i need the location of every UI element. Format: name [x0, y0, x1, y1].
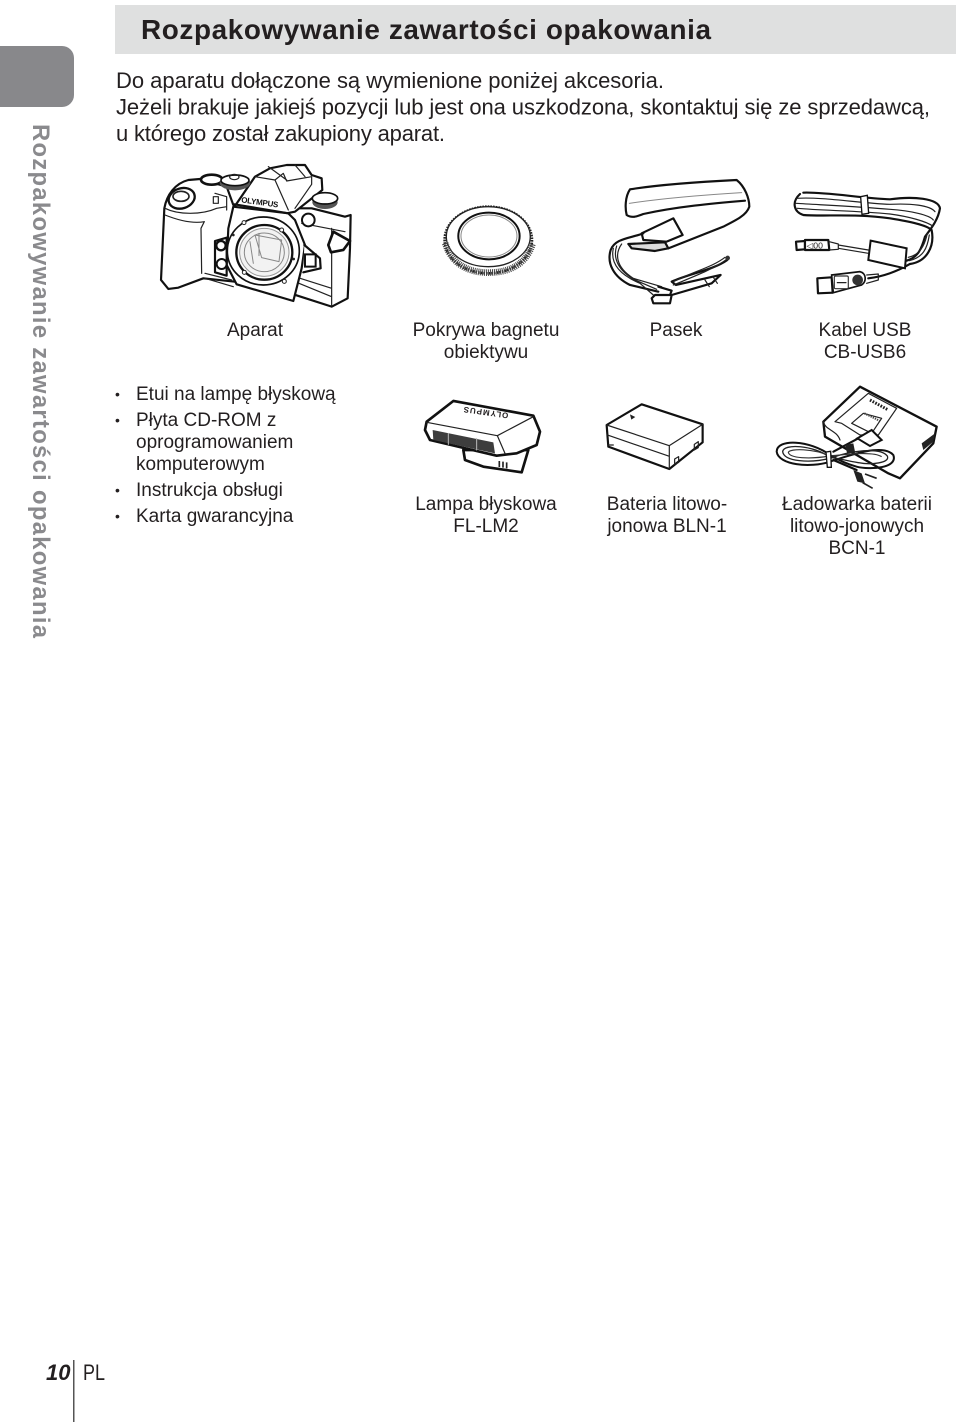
intro text: Jeżeli brakuje jakiejś pozycji lub jest ona uszkodzona, skontaktuj się ze sprzedawcą,: [116, 94, 930, 120]
icon: USB cable: ◁00: [807, 241, 823, 251]
viewfinder prism: [233, 165, 322, 213]
bulleted list: •: [115, 386, 120, 402]
heading: Rozpakowywanie zawartości opakowania: [141, 14, 711, 45]
icon: body cap: [445, 207, 533, 273]
bulleted list: Płyta CD-ROM z: [136, 410, 276, 431]
logo text on camera: OLYMPUS: [241, 195, 280, 210]
label: USB cable: [819, 320, 911, 363]
sidebar tab: [0, 46, 74, 107]
heading bar: [115, 5, 956, 54]
intro text: u którego został zakupiony aparat.: [116, 121, 445, 146]
label: charger: BCN-1: [828, 538, 886, 559]
label: flash: FL-LM2: [453, 516, 519, 537]
icon: flash: OLYMPUS: [462, 405, 509, 420]
charger cable coil: [777, 443, 894, 468]
front buttons: [215, 238, 227, 276]
icon: strap: [610, 180, 749, 303]
dials: [166, 185, 197, 212]
bulleted list: oprogramowaniem: [136, 432, 293, 453]
label: flash: [415, 494, 557, 537]
label: strap: Pasek: [650, 320, 703, 341]
icon: camera: [161, 165, 351, 307]
label: charger: litowo-jonowych: [790, 516, 924, 537]
icon: USB cable: [795, 193, 940, 293]
label: USB cable: Kabel USB: [819, 320, 911, 341]
page number: 10: [46, 1360, 71, 1385]
bulleted list: •: [115, 482, 120, 498]
page divider: [73, 1360, 74, 1422]
icon: charger: [777, 387, 937, 488]
strap lug: [328, 232, 350, 252]
label: charger: [782, 494, 932, 559]
bulleted list: Instrukcja obsługi: [136, 480, 283, 501]
bulleted list: [115, 384, 336, 527]
language code: PL: [83, 1360, 105, 1385]
label: USB cable: CB-USB6: [824, 342, 906, 363]
label: body cap: Pokrywa bagnetu: [413, 320, 559, 341]
bulleted list: Karta gwarancyjna: [136, 506, 294, 527]
bulleted list: Etui na lampę błyskową: [136, 384, 336, 405]
label: charger: Ładowarka baterii: [782, 494, 932, 515]
label: flash: Lampa błyskowa: [415, 494, 557, 515]
front plate: [227, 207, 305, 301]
icon: battery: [607, 404, 703, 469]
bulleted list: komputerowym: [136, 454, 265, 475]
camera back body: [161, 179, 351, 307]
intro text: Do aparatu dołączone są wymienione poniżej akcesoria.: [116, 68, 664, 93]
bulleted list: •: [115, 508, 120, 524]
sidebar vertical title: Rozpakowywanie zawartości opakowania: [27, 124, 54, 639]
label: body cap: [413, 320, 559, 363]
intro text: [116, 68, 930, 146]
icon: flash: [425, 401, 540, 472]
bulleted list: •: [115, 412, 120, 428]
label: camera: Aparat: [227, 320, 284, 341]
label: body cap: obiektywu: [444, 342, 528, 363]
lens mount: [227, 217, 299, 285]
label: battery: [606, 494, 727, 537]
label: battery: jonowa BLN-1: [606, 516, 727, 537]
label: battery: Bateria litowo-: [607, 494, 727, 515]
